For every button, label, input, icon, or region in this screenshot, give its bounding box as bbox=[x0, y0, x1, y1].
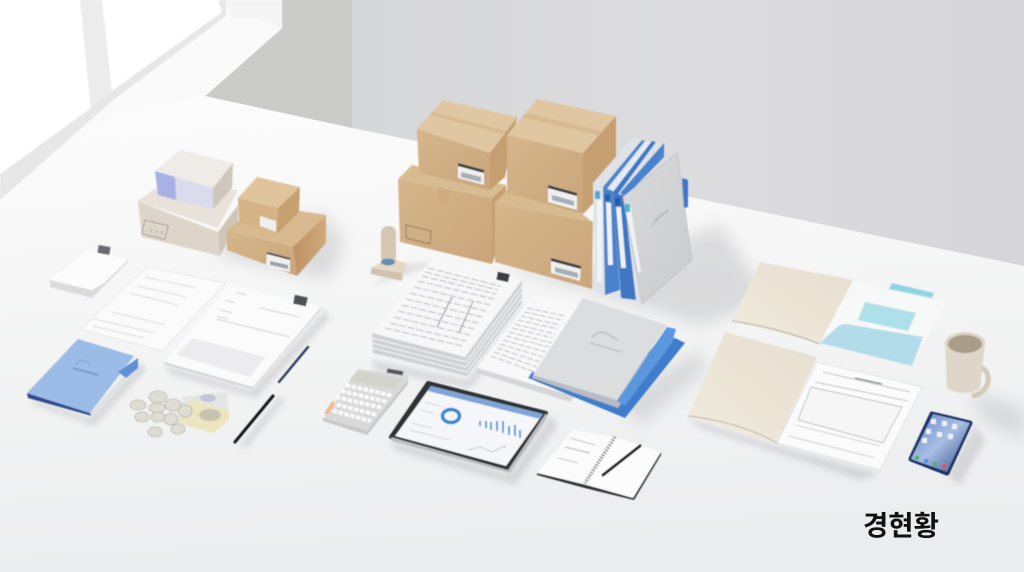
shadows on desk bbox=[30, 215, 1024, 485]
donut chart bbox=[442, 410, 460, 422]
shipping label bbox=[551, 258, 581, 281]
stacked kraft boxes, small bbox=[227, 177, 326, 276]
window with frames bbox=[0, 0, 282, 205]
open folder with form bbox=[688, 332, 922, 470]
small label bbox=[260, 216, 276, 232]
document under folder bbox=[477, 295, 577, 402]
bar chart bbox=[480, 421, 520, 438]
large kraft box: top left bbox=[417, 100, 517, 190]
binder 3 spine bbox=[613, 192, 636, 300]
pen: lower bbox=[235, 396, 273, 442]
binder 1 spine bbox=[593, 183, 604, 293]
blue pocket bbox=[820, 324, 923, 366]
name caption: 경현황 bbox=[863, 510, 939, 541]
banknotes bbox=[178, 392, 229, 433]
pen bbox=[603, 446, 640, 475]
coffee mug bbox=[945, 332, 988, 396]
blue card bbox=[858, 302, 916, 331]
blue notebook bbox=[27, 339, 138, 417]
shipping label bbox=[458, 163, 484, 185]
calculator bbox=[323, 369, 408, 435]
document: left invoice bbox=[81, 267, 225, 351]
form table bbox=[798, 387, 902, 443]
folder with blue pocket bbox=[732, 262, 945, 366]
shipping label bbox=[266, 252, 290, 272]
back wall bbox=[205, 0, 1024, 266]
pen: upper bbox=[279, 347, 308, 382]
large kraft box: lower right bbox=[495, 190, 593, 289]
blue folder with gray cover bbox=[528, 298, 685, 418]
handling marks: ↑ ↑ ↑ bbox=[149, 227, 164, 237]
handling marks bbox=[406, 225, 431, 244]
smartphone bbox=[911, 414, 970, 473]
binders bbox=[593, 137, 692, 304]
notepad bbox=[50, 245, 128, 298]
beige box with stacked lavender box bbox=[138, 150, 238, 256]
large kraft box: lower left bbox=[398, 165, 506, 264]
spiral binding bbox=[585, 437, 615, 483]
shipping label bbox=[548, 185, 577, 210]
large kraft box: top right bbox=[507, 99, 616, 214]
coins bbox=[130, 391, 192, 437]
document: right invoice bbox=[164, 284, 321, 389]
stamp bbox=[371, 226, 407, 281]
binder 2 spine bbox=[603, 187, 620, 295]
tablet with dashboard bbox=[391, 383, 547, 473]
blue tab bbox=[889, 283, 934, 298]
front binder cover bbox=[623, 153, 692, 304]
spiral notebook with pen bbox=[537, 430, 661, 500]
stack of documents bbox=[372, 258, 522, 376]
